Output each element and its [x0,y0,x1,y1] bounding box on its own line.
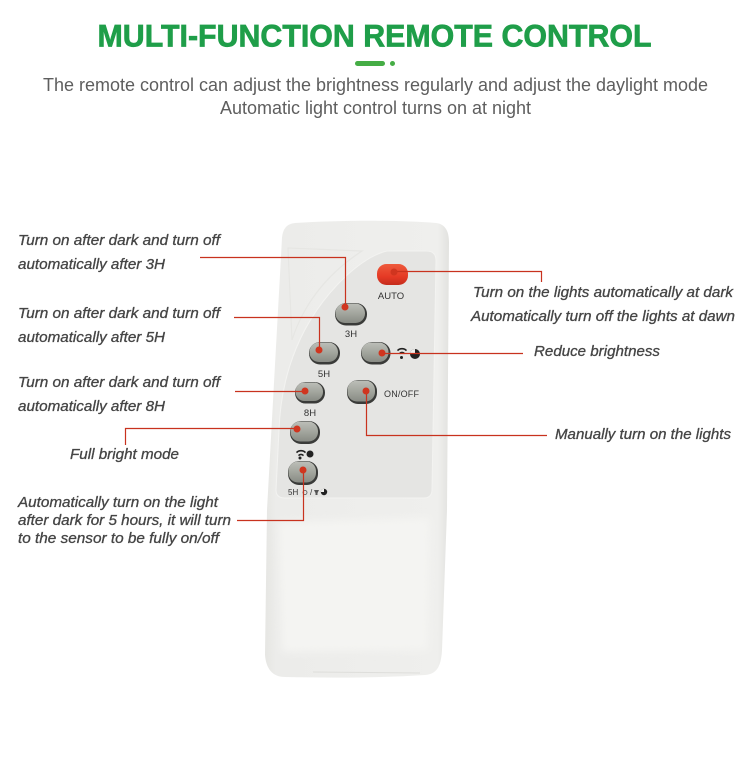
label: full bright: Full bright mode [70,447,179,463]
title: MULTI-FUNCTION REMOTE CONTROL [98,18,652,54]
button labels: AUTO [378,291,404,302]
label: 8H: Turn on after dark and turn off [18,375,222,391]
button panel [276,251,436,498]
label: 8H [18,375,222,415]
label: 3H [18,233,222,273]
label: auto: Automatically turn off the lights at dawn [470,309,735,325]
bottom edge notches [313,672,420,673]
label: 5H sensor [17,495,231,547]
label: on/off: Manually turn on the lights [555,427,731,443]
label: 5H: Turn on after dark and turn off [18,306,222,322]
mode icons [296,348,420,495]
button: 5H sensor [288,461,318,485]
subtitle: The remote control can adjust the brightness regularly and adjust the daylight mode [43,75,708,95]
button labels: ON/OFF [384,389,420,399]
button labels: / [310,488,313,497]
button: reduce brightness [361,342,390,364]
label: 5H sensor: to the sensor to be fully on/off [18,531,221,547]
button labels: 3H [345,329,357,340]
button: 3H [335,303,367,326]
label: reduce brightness: Reduce brightness [534,344,660,360]
subtitle: Automatic light control turns on at night [220,98,531,118]
button labels [288,291,420,497]
button: auto [377,264,408,285]
button: 8H [295,382,325,404]
label: 5H: automatically after 5H [18,330,166,346]
raised moulding [288,248,362,340]
remote control [265,221,449,678]
label: 3H: automatically after 3H [18,257,166,273]
button labels: 5H [288,488,298,497]
remote body [265,221,449,678]
button labels: 8H [304,408,316,419]
subtitle [43,75,708,118]
label: 5H sensor: after dark for 5 hours, it will turn [18,513,231,529]
label: 8H: automatically after 8H [18,399,166,415]
button: full bright [290,421,320,444]
label: 3H: Turn on after dark and turn off [18,233,222,249]
label: auto: Turn on the lights automatically at dark [473,285,734,301]
button: on/off [347,380,377,404]
button: 5H [309,342,340,364]
button labels: 5H [318,369,330,380]
label: auto [470,285,735,325]
label: 5H sensor: Automatically turn on the light [17,495,219,511]
title accent: green dash and dot [355,61,395,66]
label: 5H [18,306,222,346]
callout lines and dots [126,258,547,520]
